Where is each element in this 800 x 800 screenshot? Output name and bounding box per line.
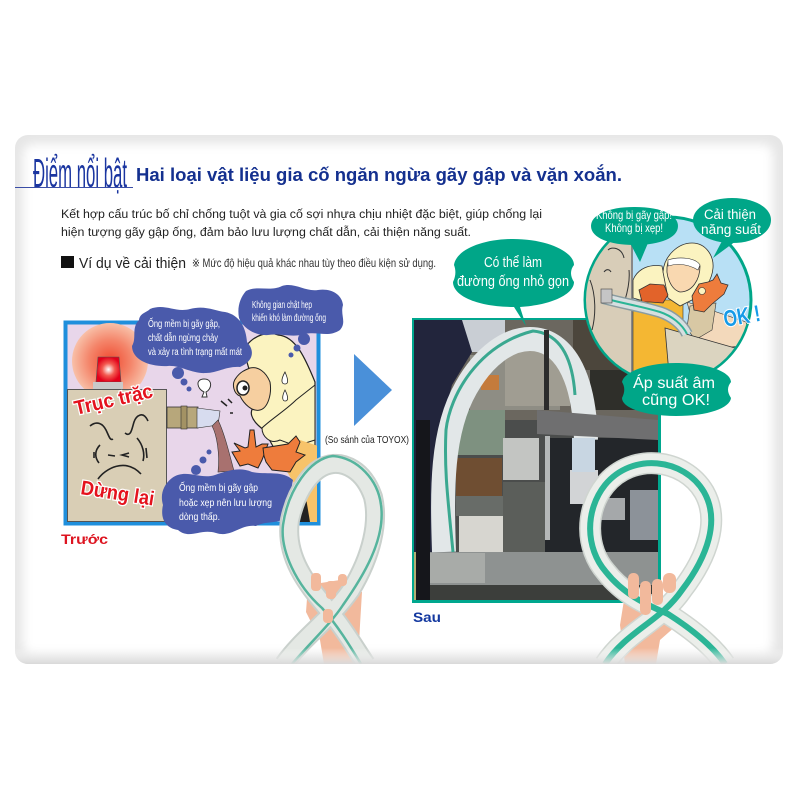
callout: narrow space: khiến khó làm đường ống [252, 312, 326, 324]
panel: after photo [414, 320, 660, 602]
icon: kinked hose [167, 379, 234, 472]
callout: kinked hose: chất dẫn ngừng chảy [148, 331, 218, 344]
text: Điểm nổi bật [33, 150, 127, 196]
subheading: improvement example: ※ Mức độ hiệu quả khác nhau tùy theo điều kiện sử dụng. [192, 256, 436, 270]
callout: no kink no collapse: Không bị gãy gập! [596, 208, 672, 222]
callout: productivity [693, 198, 771, 258]
panel: card background [15, 135, 783, 664]
heading: main title: Hai loại vật liệu gia cố ngăn ngừa gãy gập và vặn xoắn. [136, 164, 622, 185]
callout: productivity: năng suất [701, 222, 761, 237]
worried worker cartoon [232, 333, 318, 522]
steel plate [537, 410, 658, 440]
callout: narrow space: Không gian chật hẹp [252, 300, 312, 311]
callout: low flow [162, 450, 293, 534]
callout: compact piping [453, 239, 574, 326]
callout: productivity: Cải thiện [704, 207, 756, 222]
text block: description: Kết hợp cấu trúc bố chỉ chống tuột và gia cố sợi nhựa chịu nhiệt đặc biệt, giúp chống lại [61, 207, 542, 221]
callout: low flow: dòng thấp. [179, 511, 220, 523]
callout: no kink no collapse: Không bị xẹp! [605, 221, 663, 235]
callout: low flow: hoặc xẹp nên lưu lượng [179, 497, 272, 509]
callout: compact piping: Có thể làm [484, 254, 542, 271]
photo: left hose loop held by hand [283, 456, 382, 664]
text block: description: hiện tượng gãy gập ống, đảm bảo lưu lượng chất dẫn, cải thiện năng suất. [61, 224, 471, 239]
note: comparison source: (So sánh của TOYOX) [325, 434, 409, 446]
photo: right hose loop held by hand [590, 463, 725, 664]
arrow: before to after [354, 354, 392, 426]
callout: compact piping: đường ống nhỏ gọn [457, 273, 569, 290]
callout: negative pressure: cũng OK! [642, 392, 710, 409]
text block: description [61, 207, 542, 239]
label: OK: OK ! [721, 300, 762, 332]
subheading: improvement example [61, 256, 436, 272]
caption: after: Sau [413, 609, 441, 625]
callout: kinked hose: và xảy ra tình trạng mất mát [148, 346, 242, 358]
icon: alarm beacon [72, 323, 148, 399]
panel: before illustration [66, 322, 318, 524]
caption: before: Trước [61, 531, 108, 547]
callout: negative pressure: Áp suất âm [633, 375, 715, 392]
subheading: improvement example: Ví dụ về cải thiện [79, 256, 186, 272]
callout: no kink no collapse [591, 207, 678, 262]
panel: after illustration circle [585, 215, 752, 385]
panel: bottom edge fade [15, 648, 783, 664]
heading: section label [15, 150, 133, 196]
callout: kinked hose [132, 307, 252, 392]
callout: kinked hose: Ống mềm bị gãy gập, [148, 316, 220, 330]
callout: low flow: Ống mềm bị gãy gập [179, 480, 258, 494]
machine with troubled face [68, 390, 166, 522]
hose arch [443, 331, 586, 552]
callout: narrow space [238, 285, 343, 358]
label: malfunction: Trục trặc [72, 380, 155, 420]
callout: negative pressure [622, 363, 731, 416]
label: stopped: Dừng lại [79, 477, 156, 511]
